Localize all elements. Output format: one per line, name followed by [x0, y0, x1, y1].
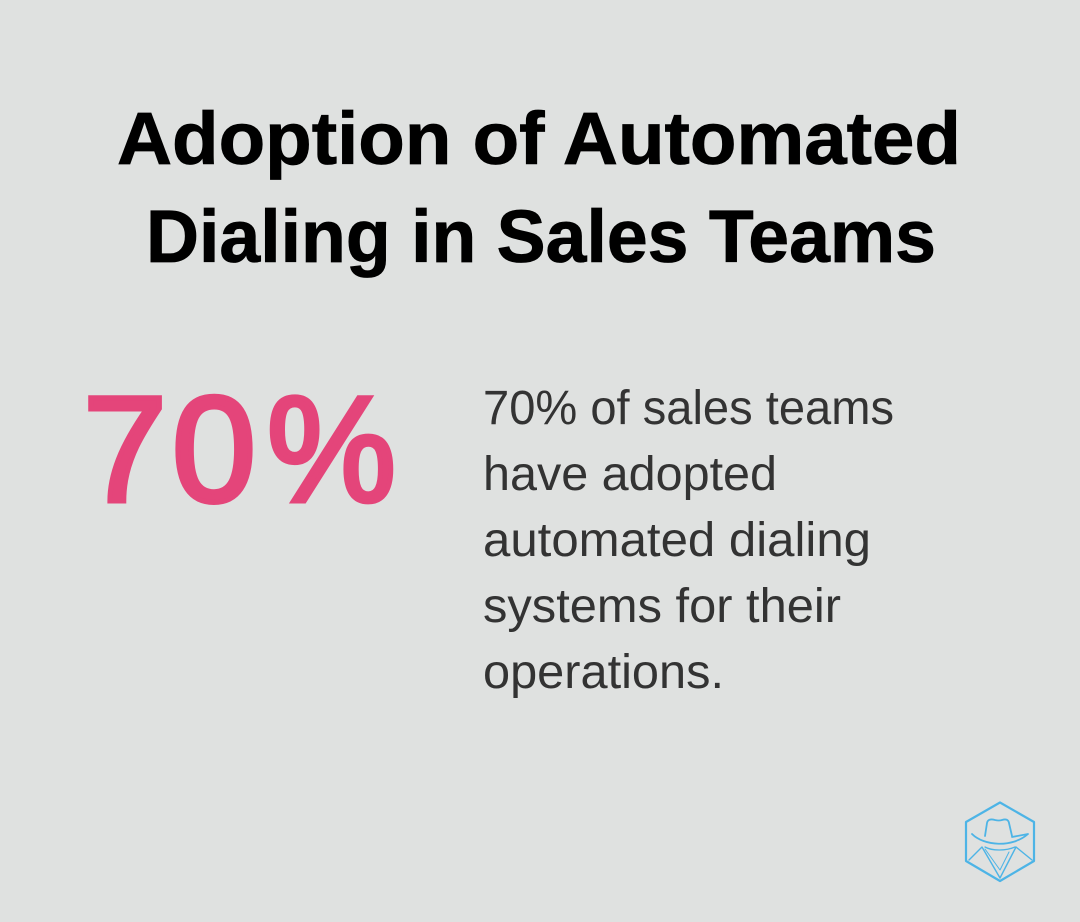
big statistic: 70%: %	[267, 365, 396, 533]
description text: systems for their	[483, 580, 841, 633]
title	[117, 97, 961, 278]
description text: 70% of sales teams	[483, 382, 894, 435]
description text: operations.	[483, 646, 724, 699]
icon: hexagon logo with hat-wearing spy	[966, 802, 1034, 881]
big statistic: 70%: 7	[83, 365, 167, 533]
description text: have adopted	[483, 448, 777, 501]
title: Dialing in Sales Teams	[146, 195, 936, 278]
description text: automated dialing	[483, 514, 871, 567]
description text	[483, 382, 894, 699]
title: Adoption of Automated	[117, 97, 961, 180]
big statistic: 70%	[83, 365, 396, 533]
big statistic: 70%: 0	[172, 365, 256, 533]
